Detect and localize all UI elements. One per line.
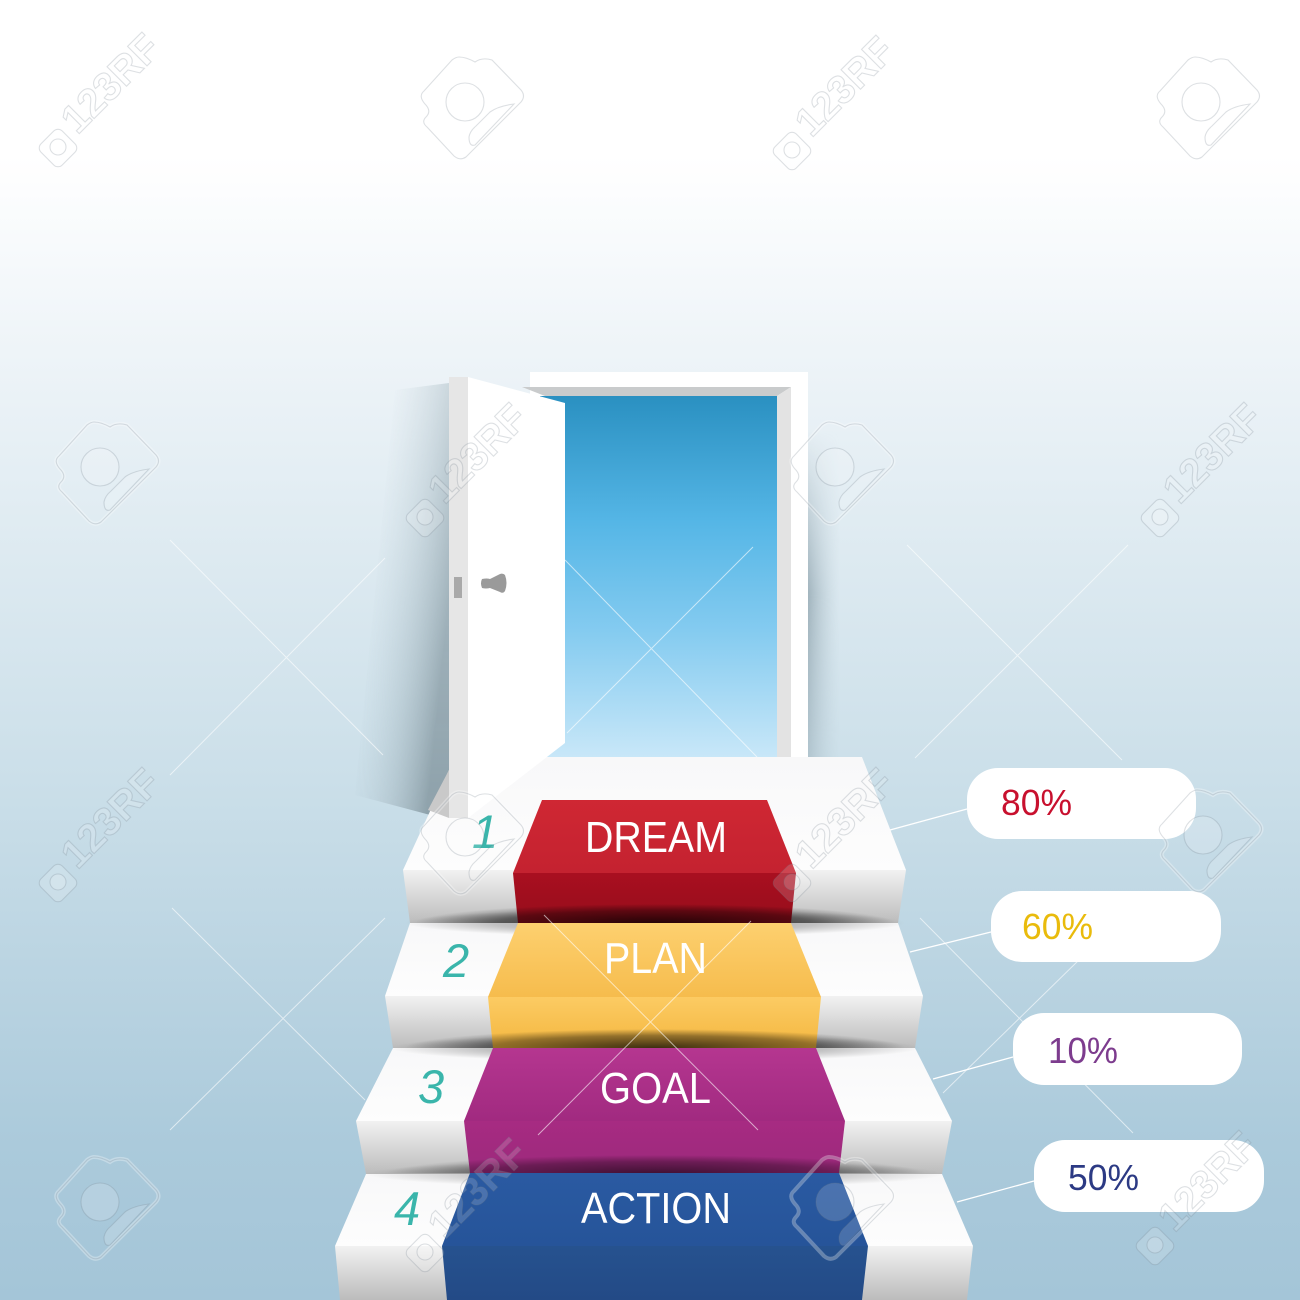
label: action: ACTION — [581, 1184, 731, 1233]
step labels — [581, 813, 731, 1233]
callout: 80% — [890, 768, 1196, 839]
carpet — [442, 800, 868, 1300]
carpet: red — [513, 800, 796, 923]
staircase — [335, 757, 973, 1300]
frame right reveal — [777, 387, 791, 758]
door frame — [530, 372, 808, 758]
number 1: 1 — [472, 805, 498, 858]
carpet: blue — [442, 1173, 868, 1300]
riser shadows — [385, 904, 925, 1193]
step 2 — [385, 923, 923, 1048]
watermark stamps: 123RF — [420, 396, 536, 512]
door knob — [481, 574, 506, 593]
callout: 50% — [957, 1140, 1264, 1212]
step numbers — [394, 805, 498, 1235]
callout: 10% — [933, 1013, 1242, 1085]
door edge — [449, 377, 468, 818]
label: goal: GOAL — [600, 1064, 711, 1113]
door shadow on top step — [428, 770, 449, 818]
callout: 50%: 50% — [1068, 1157, 1139, 1198]
step shadows on treads — [365, 909, 945, 1188]
carpet: purple — [464, 1048, 845, 1173]
door cast shadow — [370, 383, 449, 814]
percentage callouts — [890, 768, 1264, 1212]
watermark stamps: 123RF — [1150, 1124, 1266, 1240]
number 2: 2 — [442, 934, 469, 987]
step 4 — [335, 1174, 973, 1300]
door panel — [468, 377, 565, 818]
carpet: yellow — [488, 923, 821, 1048]
watermark stamps: 123RF — [787, 29, 903, 145]
watermark stamps: 123RF — [420, 1131, 536, 1247]
step 1 — [403, 757, 906, 923]
frame cast shadow — [808, 450, 832, 757]
frame top reveal — [522, 387, 791, 396]
number 4: 4 — [394, 1182, 420, 1235]
step 3 — [356, 1048, 952, 1174]
sky through the doorway — [540, 396, 777, 757]
watermark stamps: 123RF — [53, 761, 169, 877]
callout: 10%: 10% — [1048, 1030, 1118, 1071]
door latch — [454, 577, 462, 598]
open door leaf — [428, 377, 565, 818]
label: plan: PLAN — [604, 934, 707, 983]
callout: 80%: 80% — [1001, 782, 1072, 823]
label: dream: DREAM — [585, 813, 727, 862]
callout: 60%: 60% — [1022, 906, 1093, 947]
watermark stamps: 123RF — [1155, 396, 1271, 512]
watermark stamps: 123RF — [787, 761, 903, 877]
callout: 60% — [910, 891, 1221, 962]
door scene — [355, 372, 840, 820]
watermark stamps: 123RF — [53, 26, 169, 142]
number 3: 3 — [418, 1060, 444, 1113]
